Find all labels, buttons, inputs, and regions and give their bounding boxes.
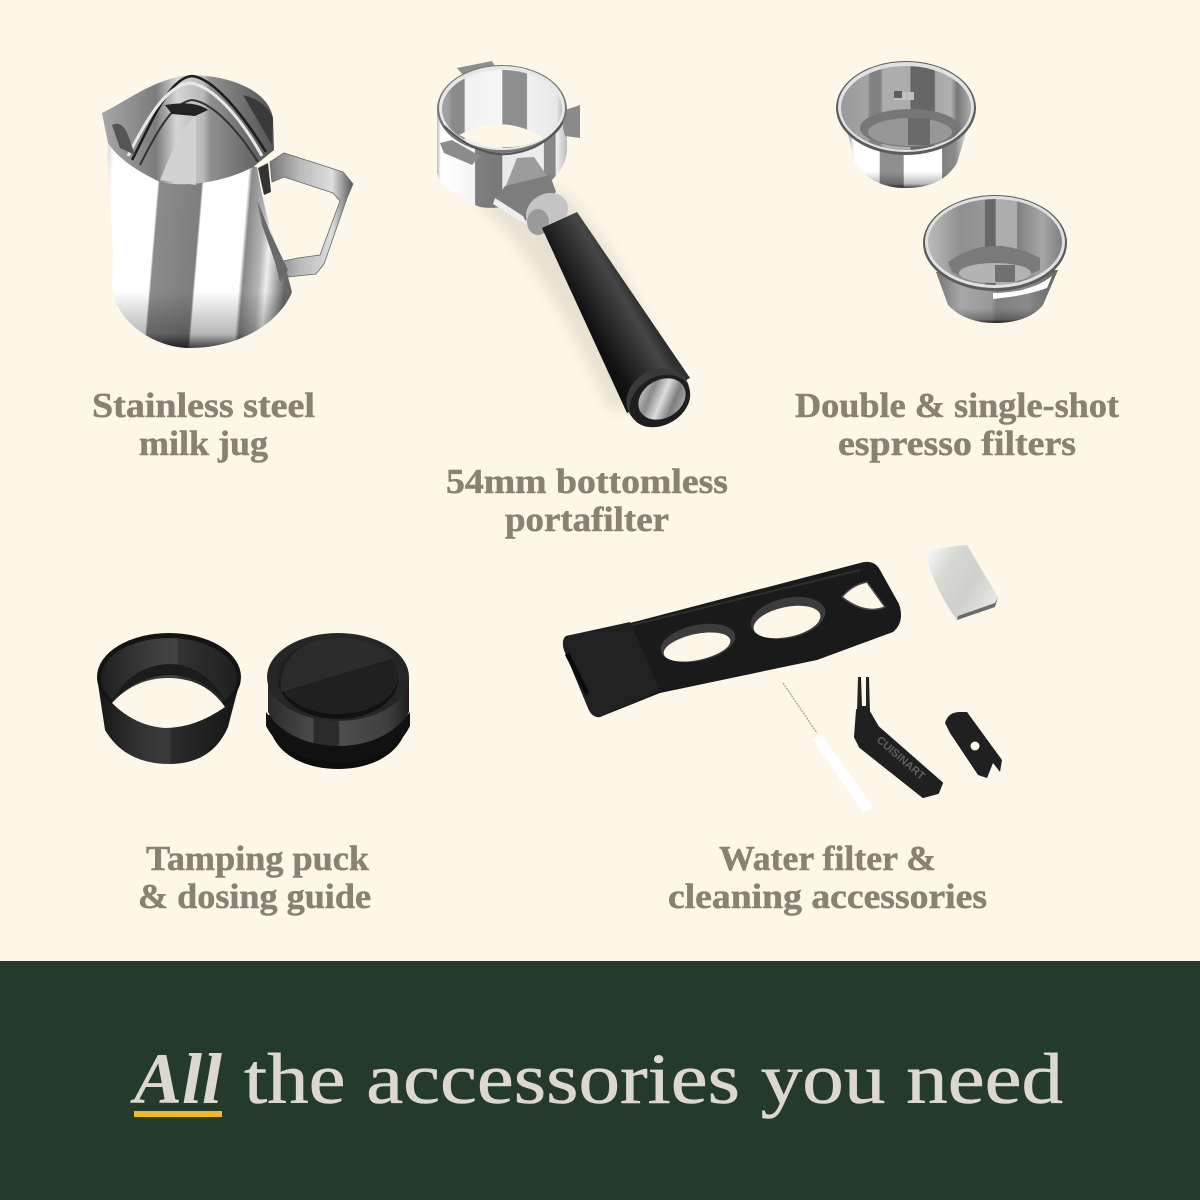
icon: dosing guide ring	[97, 633, 241, 764]
text: brand on cleaning tool: CUISINART	[874, 734, 927, 783]
icon: bottomless portafilter	[437, 61, 700, 438]
caption: tamping puck and dosing guide	[138, 839, 371, 916]
caption: milk jug	[92, 386, 315, 463]
caption: espresso filters: espresso filters	[838, 424, 1076, 463]
heading: all the accessories you need: the accessories you need	[244, 1039, 1063, 1119]
caption: espresso filters	[795, 386, 1119, 463]
heading: all the accessories you need: All	[130, 1039, 222, 1119]
caption: portafilter	[446, 462, 728, 539]
icon: water filter	[925, 545, 998, 620]
caption: espresso filters: Double & single-shot	[795, 386, 1119, 425]
caption: water filter and cleaning accessories: Water filter &	[719, 839, 936, 878]
icon: cleaning pin	[783, 683, 873, 813]
icon: double shot espresso filter	[836, 61, 976, 188]
underline: yellow accent	[134, 1111, 222, 1117]
panel: green banner	[0, 961, 1200, 1200]
icon: tamping puck	[266, 633, 410, 769]
caption: water filter and cleaning accessories: cleaning accessories	[668, 877, 987, 916]
caption: tamping puck and dosing guide: & dosing guide	[138, 877, 371, 916]
caption: milk jug: Stainless steel	[92, 386, 315, 425]
icon: single shot espresso filter	[923, 195, 1067, 323]
icon: cleaning clip	[945, 712, 1002, 778]
caption: milk jug: milk jug	[139, 424, 269, 463]
caption: portafilter: 54mm bottomless	[446, 462, 728, 501]
icon: black cleaning tray	[563, 562, 901, 717]
caption: tamping puck and dosing guide: Tamping puck	[146, 839, 370, 878]
caption: portafilter: portafilter	[505, 500, 669, 539]
icon: cleaning tool	[855, 677, 942, 797]
caption: water filter and cleaning accessories	[668, 839, 987, 916]
icon: stainless steel milk jug	[102, 75, 353, 348]
